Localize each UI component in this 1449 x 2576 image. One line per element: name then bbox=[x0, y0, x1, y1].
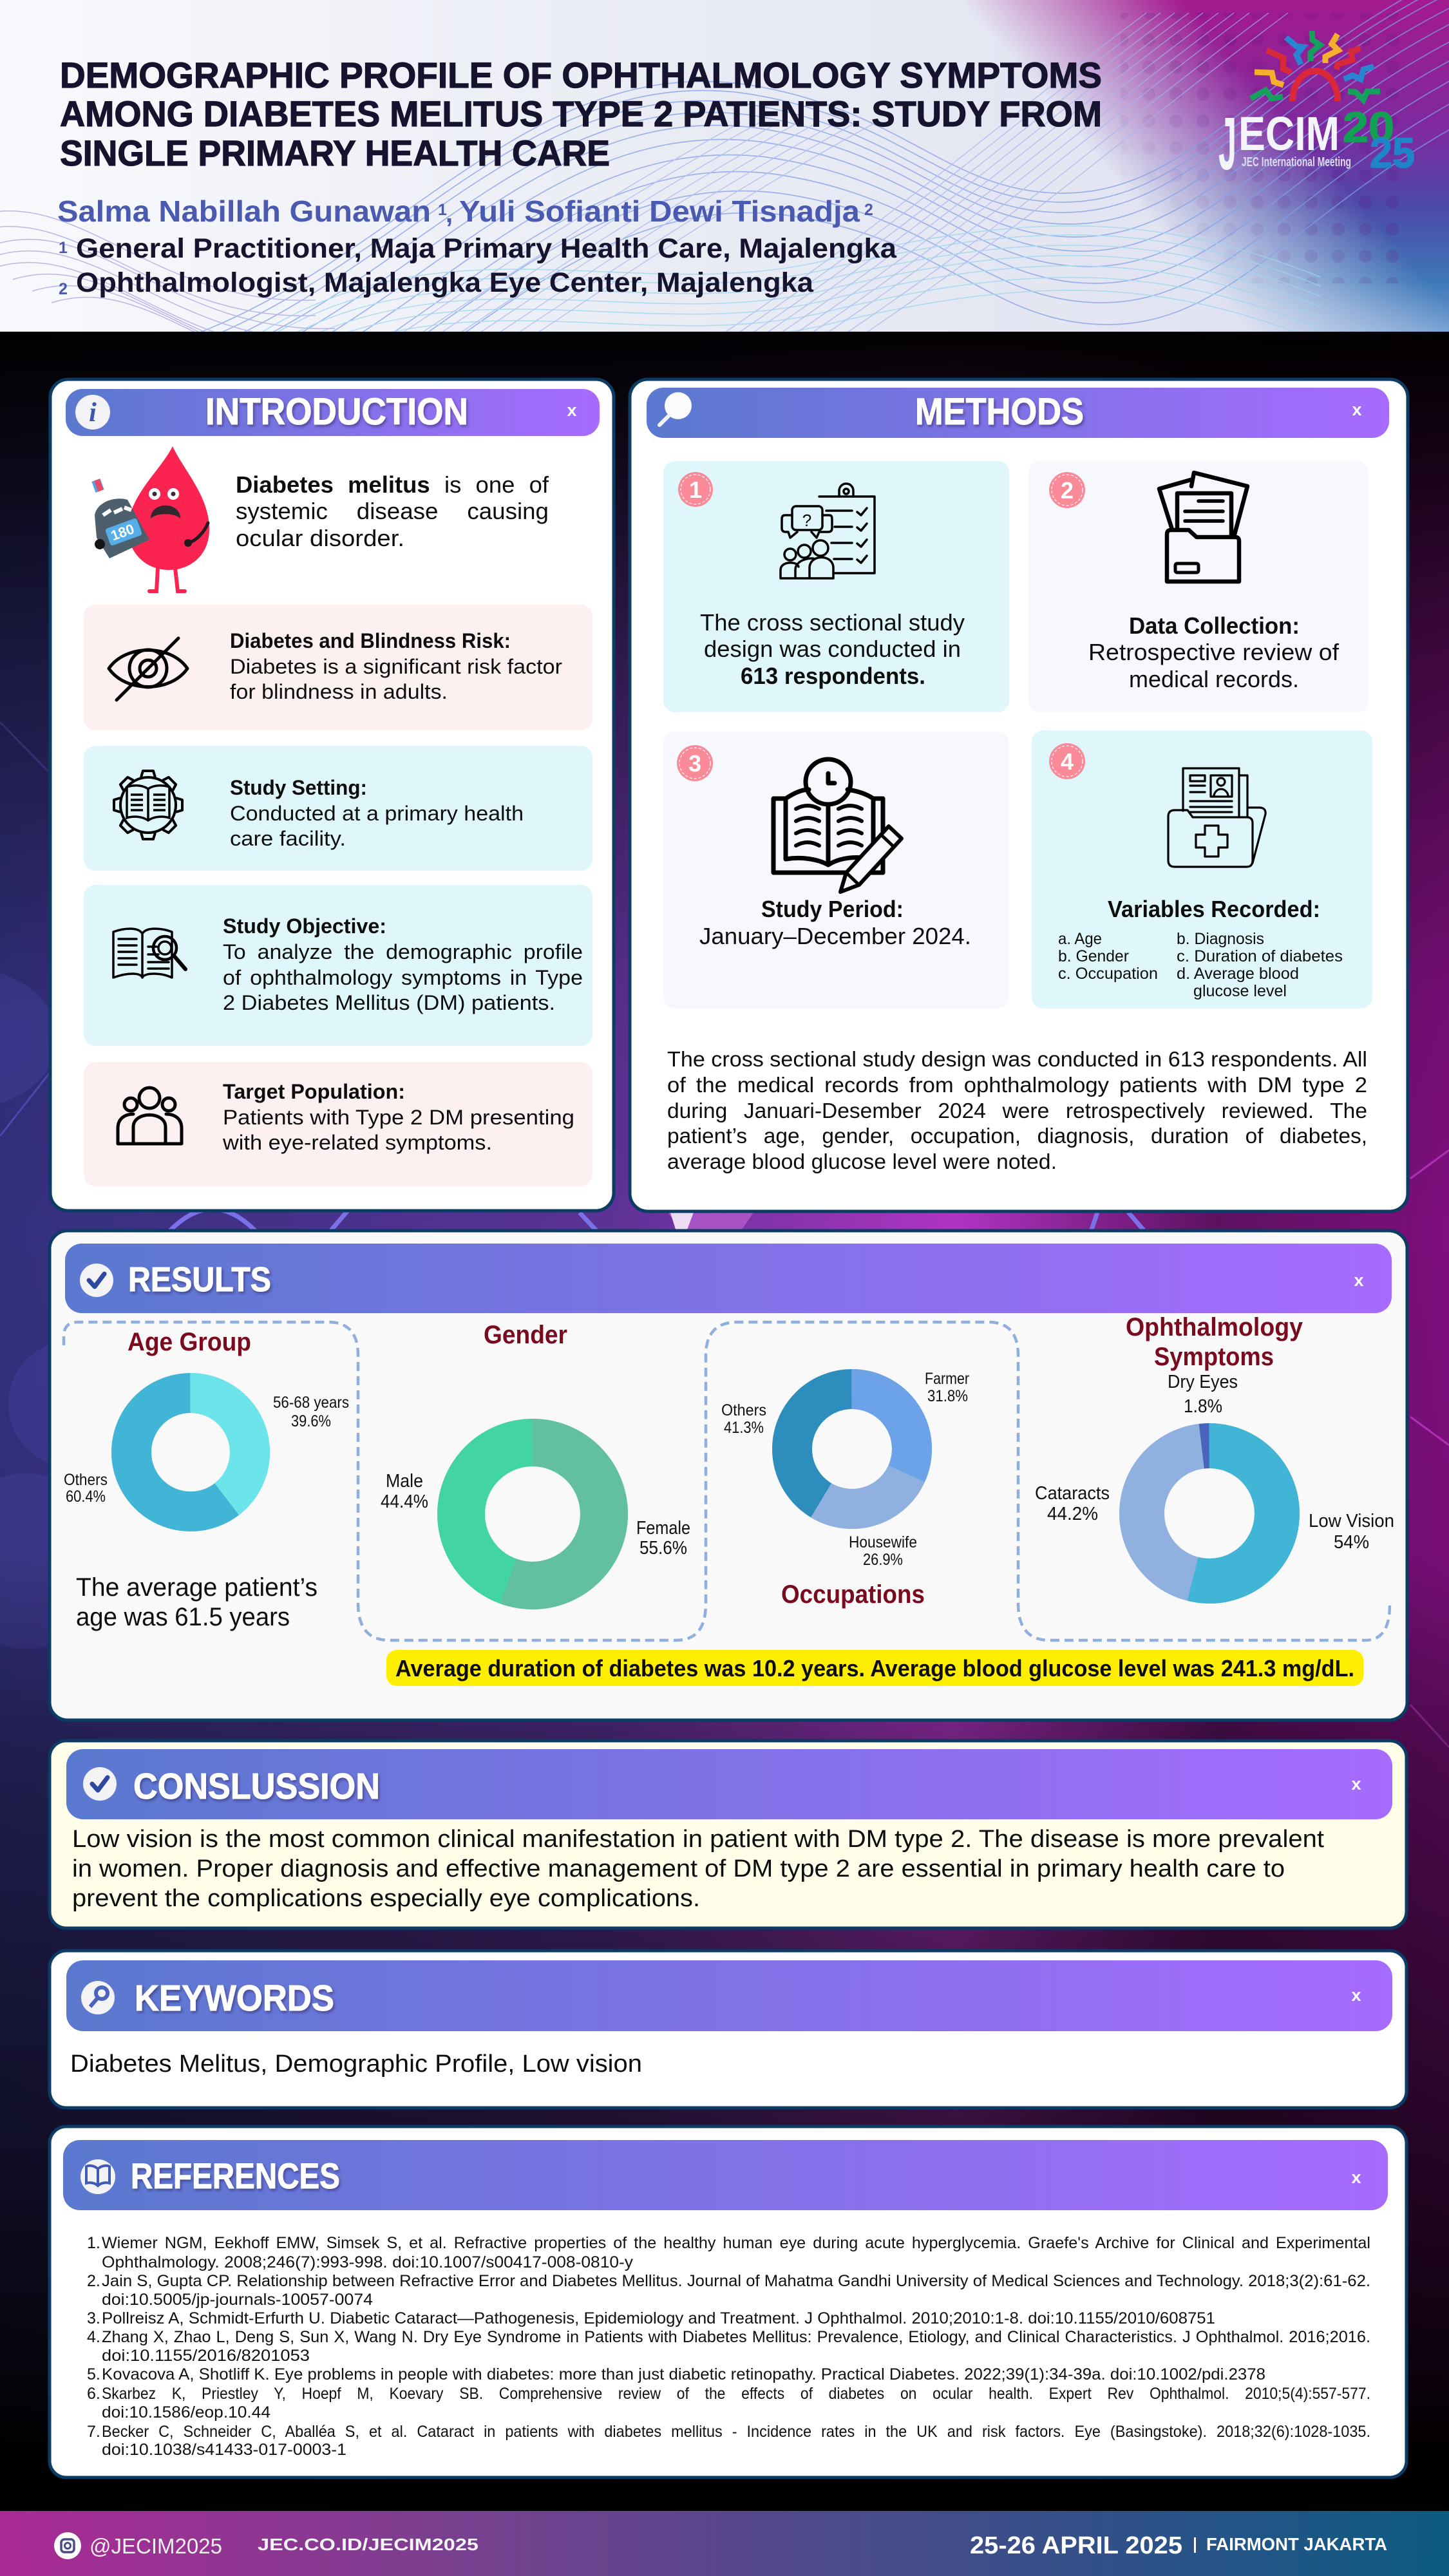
heading: keywords bbox=[66, 1960, 1392, 2031]
chart: ophthalmology symptoms donut: 54% bbox=[1334, 1532, 1369, 1553]
logo: JECIM 2025: J bbox=[1218, 102, 1236, 185]
text: conclusion body bbox=[72, 1826, 1324, 1912]
card 2: data collection: medical records. bbox=[1129, 666, 1299, 692]
badge 1 bbox=[678, 472, 713, 507]
badge 4 bbox=[1049, 743, 1085, 779]
card 1: study design: ? bbox=[802, 511, 811, 530]
card: study objective: To analyze the demographic profile bbox=[223, 940, 583, 963]
text: reference list: 6. bbox=[87, 2385, 100, 2403]
card 1: study design bbox=[663, 461, 1009, 712]
icon: crossed eye bbox=[109, 638, 187, 700]
logo: JECIM 2025: JEC International Meeting bbox=[1242, 155, 1351, 169]
header banner bbox=[0, 0, 1449, 466]
title: DEMOGRAPHIC PROFILE OF OPHTHALMOLOGY SYMPTOMS bbox=[60, 55, 1102, 95]
icon: group of people bbox=[118, 1088, 182, 1144]
heading: conclusion bbox=[66, 1749, 1392, 1819]
affiliations bbox=[59, 233, 897, 298]
badge 3 bbox=[677, 745, 713, 781]
card 3: study period: January–December 2024. bbox=[699, 923, 971, 949]
title: SINGLE PRIMARY HEALTH CARE bbox=[60, 133, 610, 173]
icon: instagram bbox=[54, 2532, 81, 2559]
chart: age group donut: 39.6% bbox=[291, 1412, 331, 1430]
authors: Yuli Sofianti Dewi Tisnadja bbox=[459, 194, 860, 228]
card: study objective bbox=[84, 885, 592, 1046]
icon: book, clock and pencil bbox=[773, 759, 902, 892]
heading: methods: METHODS bbox=[915, 391, 1084, 433]
text: reference list: Wiemer NGM, Eekhoff EMW, Simsek S, et al. Refractive properties of the healthy human eye during acute hyperglycemia. Graefe's Archive for Clinical and Experimental bbox=[102, 2234, 1370, 2252]
chart: gender donut bbox=[381, 1321, 690, 1586]
text: reference list: 2. bbox=[87, 2272, 100, 2290]
panel: conclusion bbox=[50, 1741, 1406, 1928]
card 3: study period: Study Period: bbox=[761, 896, 904, 922]
text: reference list: Pollreisz A, Schmidt-Erfurth U. Diabetic Cataract—Pathogenesis, Epidemiology and Treatment. J Ophthalmol. 2010;2010:1-8. doi:10.1155/2010/608751 bbox=[102, 2309, 1215, 2327]
text: reference list: Skarbez K, Priestley Y, Hoepf M, Koevary SB. Comprehensive review of the effects of diabetes on ocular health. Expert Rev Ophthalmol. 2010;5(4):557-577. bbox=[102, 2385, 1370, 2403]
card: diabetes and blindness risk: for blindness in adults. bbox=[230, 680, 448, 703]
text: reference list: 5. bbox=[87, 2365, 100, 2383]
text: diabetes melitus intro bbox=[236, 471, 549, 551]
dashed serpentine frame bbox=[64, 1322, 1390, 1640]
chart: age group donut: 60.4% bbox=[66, 1488, 106, 1506]
heading: results: x bbox=[1354, 1271, 1364, 1290]
heading: introduction bbox=[66, 389, 600, 436]
card: target population bbox=[84, 1062, 592, 1186]
text: methods paragraph: The cross sectional study design was conducted in 613 respondents. All bbox=[667, 1047, 1367, 1071]
chart: ophthalmology symptoms donut: Low Vision bbox=[1309, 1511, 1394, 1531]
icon: book with magnifier bbox=[113, 929, 185, 978]
heading: conclusion: x bbox=[1351, 1774, 1361, 1794]
heading: introduction: INTRODUCTION bbox=[205, 391, 468, 433]
chart: ophthalmology symptoms donut: Dry Eyes bbox=[1168, 1372, 1238, 1392]
chart: occupations donut: 26.9% bbox=[863, 1551, 903, 1569]
chart: occupations donut: Farmer bbox=[925, 1370, 969, 1388]
text: average age: age was 61.5 years bbox=[76, 1603, 290, 1631]
list of recorded variables bbox=[1058, 930, 1343, 1000]
list of recorded variables: c. Occupation bbox=[1058, 965, 1158, 983]
chart: age group donut bbox=[64, 1328, 349, 1511]
chart: gender donut: 55.6% bbox=[639, 1538, 687, 1558]
heading: results: RESULTS bbox=[128, 1260, 271, 1299]
chart: ophthalmology symptoms donut: Cataracts bbox=[1035, 1483, 1110, 1504]
card: diabetes and blindness risk: Diabetes and Blindness Risk: bbox=[230, 629, 511, 652]
footer bar bbox=[0, 2511, 1449, 2576]
card 2: data collection: Retrospective review of bbox=[1088, 639, 1340, 665]
text: reference list: Ophthalmology. 2008;246(7):993-998. doi:10.1007/s00417-008-0810-y bbox=[102, 2253, 634, 2271]
list of recorded variables: b. Diagnosis bbox=[1177, 930, 1264, 948]
text: reference list: 3. bbox=[87, 2309, 100, 2327]
affiliations: Ophthalmologist, Majalengka Eye Center, Majalengka bbox=[76, 267, 814, 298]
logo: JECIM 2025: 20 bbox=[1343, 103, 1394, 151]
chart: gender donut: Male bbox=[386, 1471, 423, 1492]
badge 4: 4 bbox=[1061, 748, 1074, 775]
text: conclusion body: prevent the complications especially eye complications. bbox=[72, 1885, 700, 1912]
text: reference list: Zhang X, Zhao L, Deng S, Sun X, Wang N. Dry Eye Syndrome in Patients with Diabetes Mellitus: Prevalence, Etiology, and Clinical Characteristics. J Ophthalmol. 2016;2016. bbox=[102, 2328, 1370, 2346]
icon: blood drop character with glucose meter: 180 bbox=[109, 520, 137, 544]
text: methods paragraph: during Januari-Desember 2024 were retrospectively reviewed. The bbox=[667, 1099, 1367, 1122]
text: methods paragraph: of the medical records from ophthalmology patients with DM type 2 bbox=[667, 1073, 1367, 1097]
chart: ophthalmology symptoms donut: Ophthalmology bbox=[1126, 1313, 1303, 1341]
chart: occupations donut: Occupations bbox=[781, 1580, 925, 1609]
footer bar: @JECIM2025 bbox=[90, 2534, 222, 2558]
card 2: data collection bbox=[1028, 461, 1368, 712]
heading: keywords: x bbox=[1351, 1985, 1361, 2005]
text: diabetes melitus intro: Diabetes melitus is one of bbox=[236, 471, 549, 498]
badge 1: 1 bbox=[689, 477, 702, 503]
list of recorded variables: d. Average blood bbox=[1177, 965, 1299, 983]
title: AMONG DIABETES MELITUS TYPE 2 PATIENTS: STUDY FROM bbox=[60, 93, 1102, 134]
icon: document folder bbox=[1159, 473, 1247, 582]
list of recorded variables: b. Gender bbox=[1058, 947, 1129, 965]
text: reference list: 7. bbox=[87, 2423, 100, 2441]
authors bbox=[57, 194, 873, 228]
heading: methods bbox=[647, 388, 1389, 438]
list of recorded variables: glucose level bbox=[1193, 982, 1287, 1000]
text: diabetes melitus intro: systemic disease causing bbox=[236, 498, 549, 524]
card: study setting: Study Setting: bbox=[230, 776, 367, 799]
card 2: data collection: Data Collection: bbox=[1129, 612, 1300, 639]
chart: age group donut: Others bbox=[64, 1471, 108, 1489]
text: reference list: Jain S, Gupta CP. Relationship between Refractive Error and Diabetes Mellitus. Journal of Mahatma Gandhi University of Medical Sciences and Technology. 2018;3(2):61-62. bbox=[102, 2272, 1370, 2290]
text: reference list bbox=[87, 2234, 1370, 2459]
card 3: study period bbox=[663, 732, 1009, 1009]
title bbox=[60, 55, 1102, 173]
chart: occupations donut: Housewife bbox=[849, 1533, 917, 1551]
chart: age group donut: Age Group bbox=[128, 1328, 251, 1356]
card 4: variables recorded bbox=[1032, 730, 1372, 1009]
card: target population: Patients with Type 2 DM presenting bbox=[223, 1106, 574, 1129]
heading: results bbox=[65, 1244, 1392, 1313]
footer bar: JEC.CO.ID/JECIM2025 bbox=[258, 2535, 478, 2554]
chart: age group donut: 56-68 years bbox=[273, 1394, 349, 1412]
text: reference list: Becker C, Schneider C, Aballéa S, et al. Cataract in patients with diabetes mellitus - Incidence rates in the UK and risk factors. Eye (Basingstoke). 2018;32(6):1028-1035. bbox=[102, 2423, 1370, 2441]
card: diabetes and blindness risk bbox=[84, 605, 592, 730]
chart: ophthalmology symptoms donut bbox=[1035, 1313, 1394, 1581]
heading: references bbox=[63, 2140, 1388, 2210]
card 1: study design: 613 respondents. bbox=[741, 663, 925, 689]
text: diabetes melitus intro: ocular disorder. bbox=[236, 525, 404, 551]
text: reference list: doi:10.1586/eop.10.44 bbox=[102, 2403, 270, 2421]
heading: introduction: i bbox=[89, 398, 97, 428]
card: study setting bbox=[84, 746, 592, 871]
footer bar: FAIRMONT JAKARTA bbox=[1206, 2534, 1387, 2554]
text: reference list: doi:10.1038/s41433-017-0003-1 bbox=[102, 2441, 346, 2459]
chart: ophthalmology symptoms donut: 1.8% bbox=[1184, 1396, 1222, 1417]
heading: references: REFERENCES bbox=[131, 2155, 340, 2196]
logo: JECIM 2025 bbox=[1218, 31, 1415, 185]
text: reference list: 4. bbox=[87, 2328, 100, 2346]
text: reference list: doi:10.5005/jp-journals-10057-0074 bbox=[102, 2291, 373, 2309]
authors: 1 bbox=[438, 201, 447, 219]
affiliations: 1 bbox=[59, 239, 68, 257]
chart: occupations donut: Others bbox=[721, 1401, 766, 1419]
authors: Salma Nabillah Gunawan bbox=[57, 194, 431, 228]
chart: occupations donut: 41.3% bbox=[724, 1419, 764, 1437]
logo: JECIM 2025: ECIM bbox=[1238, 107, 1340, 160]
card: target population: with eye-related symptoms. bbox=[222, 1131, 492, 1154]
card 1: study design: The cross sectional study bbox=[700, 609, 965, 636]
card 1: study design: design was conducted in bbox=[704, 636, 961, 662]
text: conclusion body: Low vision is the most common clinical manifestation in patient with DM type 2. The disease is more prevalent bbox=[72, 1826, 1324, 1853]
heading: keywords: KEYWORDS bbox=[135, 1978, 334, 2019]
card: study objective: Study Objective: bbox=[223, 914, 386, 938]
affiliations: General Practitioner, Maja Primary Health Care, Majalengka bbox=[76, 233, 897, 264]
badge 2 bbox=[1049, 472, 1085, 508]
text: reference list: doi:10.1155/2016/8201053 bbox=[102, 2347, 310, 2365]
heading: conclusion: CONSLUSSION bbox=[133, 1766, 380, 1807]
panel: methods bbox=[630, 379, 1408, 1211]
chart: gender donut: 44.4% bbox=[381, 1492, 428, 1512]
text: average age: The average patient’s bbox=[76, 1573, 317, 1602]
panel: introduction bbox=[50, 379, 614, 1211]
heading: introduction: x bbox=[567, 401, 577, 420]
text: keywords list: Diabetes Melitus, Demographic Profile, Low vision bbox=[70, 2050, 642, 2078]
icon: medical record folder bbox=[1168, 768, 1265, 867]
authors: , bbox=[446, 200, 453, 228]
card: target population: Target Population: bbox=[223, 1080, 405, 1103]
card: study setting: care facility. bbox=[230, 827, 346, 850]
badge 2: 2 bbox=[1061, 477, 1074, 504]
chart: gender donut: Female bbox=[636, 1518, 690, 1539]
chart: occupations donut bbox=[721, 1370, 969, 1609]
affiliations: 2 bbox=[59, 280, 68, 298]
chart: ophthalmology symptoms donut: Symptoms bbox=[1154, 1343, 1274, 1371]
icon: gear with book bbox=[114, 771, 182, 839]
text: methods paragraph: patient’s age, gender, occupation, diagnosis, duration of diabetes, bbox=[667, 1124, 1367, 1148]
authors: 2 bbox=[864, 201, 873, 219]
badge 3: 3 bbox=[688, 750, 701, 777]
card 4: variables recorded: Variables Recorded: bbox=[1108, 896, 1320, 922]
panel: results bbox=[50, 1231, 1407, 1720]
heading: methods: x bbox=[1352, 400, 1362, 419]
text: reference list: Kovacova A, Shotliff K. Eye problems in people with diabetes: more than just diabetic retinopathy. Practical Diabetes. 2022;39(1):34-39a. doi:10.1002/pdi.2378 bbox=[102, 2365, 1265, 2383]
list of recorded variables: c. Duration of diabetes bbox=[1177, 947, 1343, 965]
logo: JECIM 2025: 25 bbox=[1370, 129, 1415, 176]
card: study setting: Conducted at a primary health bbox=[230, 802, 524, 825]
chart: occupations donut: 31.8% bbox=[927, 1387, 968, 1405]
text: reference list: 1. bbox=[87, 2234, 100, 2252]
text: conclusion body: in women. Proper diagnosis and effective management of DM type 2 are essential in primary health care to bbox=[72, 1855, 1285, 1882]
chart: gender donut: Gender bbox=[484, 1321, 567, 1349]
footer bar: 25-26 APRIL 2025 bbox=[970, 2532, 1182, 2559]
text: methods paragraph bbox=[667, 1047, 1367, 1173]
icon: questionnaire and people bbox=[781, 484, 875, 578]
chart: ophthalmology symptoms donut: 44.2% bbox=[1047, 1504, 1098, 1524]
panel: keywords bbox=[50, 1951, 1406, 2108]
card: study objective: 2 Diabetes Mellitus (DM) patients. bbox=[223, 991, 555, 1014]
icon: blood drop character with glucose meter bbox=[91, 446, 209, 591]
heading: references: x bbox=[1351, 2168, 1361, 2187]
list of recorded variables: a. Age bbox=[1058, 930, 1102, 948]
text: methods paragraph: average blood glucose level were noted. bbox=[667, 1150, 1057, 1173]
card: diabetes and blindness risk: Diabetes is a significant risk factor bbox=[230, 655, 562, 678]
card: study objective: of ophthalmology symptoms in Type bbox=[223, 966, 583, 989]
panel: references bbox=[50, 2126, 1406, 2477]
callout: duration and glucose: Average duration of diabetes was 10.2 years. Average blood glucose level was 241.3 mg/dL. bbox=[395, 1655, 1354, 1681]
text: average age bbox=[76, 1573, 317, 1631]
